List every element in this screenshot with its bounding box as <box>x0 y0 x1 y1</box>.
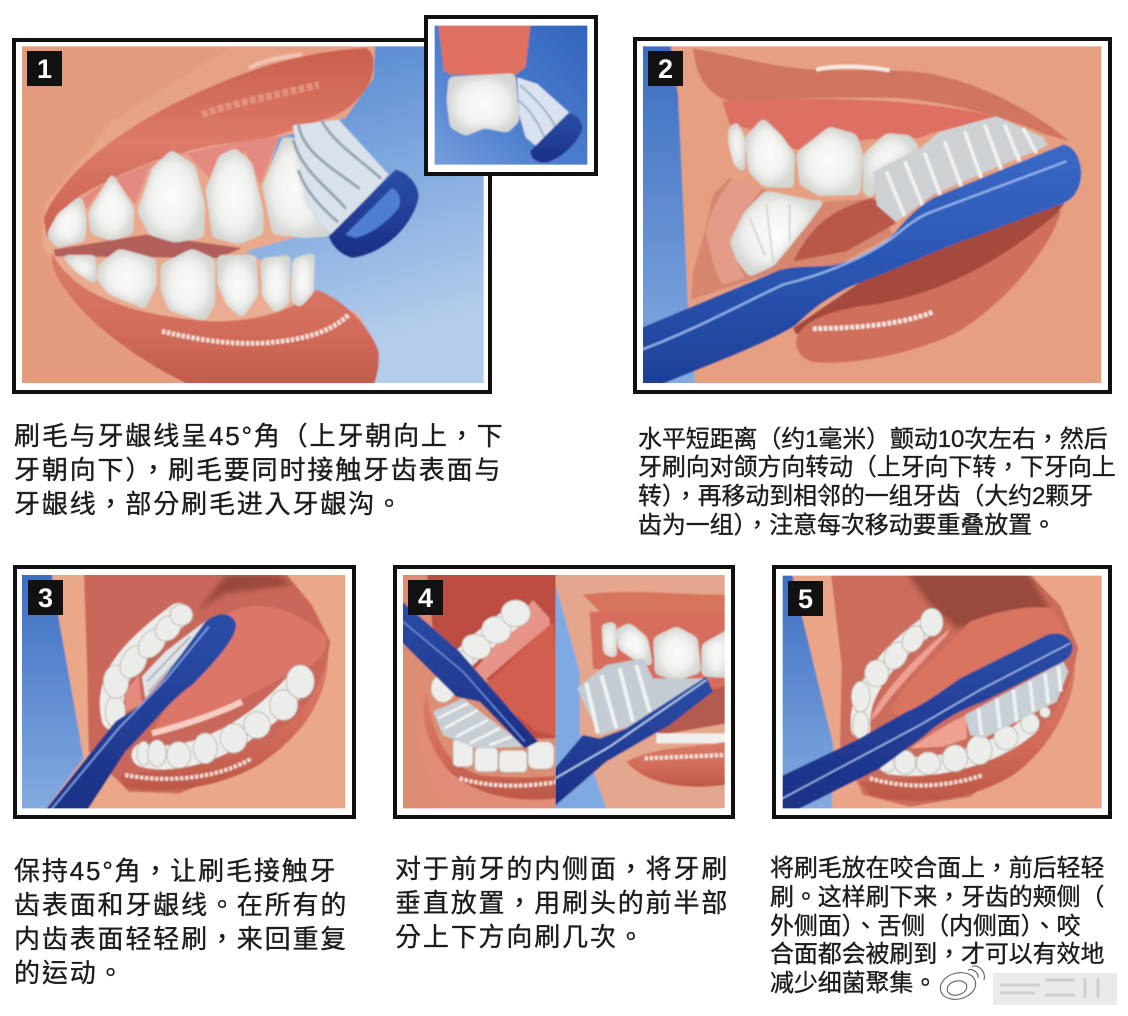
icon: weibo watermark <box>937 966 1117 1005</box>
text: step 1 instructions: 刷毛与牙龈线呈45°角（上牙朝向上，下 <box>14 421 504 451</box>
panel: inset close-up of bristles at gum line <box>426 17 596 174</box>
text: step 2 instructions: 转），再移动到相邻的一组牙齿（大约2颗牙 <box>638 483 1093 510</box>
text: step 1 instructions <box>14 421 504 519</box>
badge: step number 1: 1 <box>37 54 52 84</box>
text: step 3 instructions: 的运动。 <box>14 958 125 988</box>
text: step 4 instructions: 分上下方向刷几次。 <box>395 922 646 952</box>
badge: step number 4 <box>408 580 443 615</box>
text: step 5 instructions: 将刷毛放在咬合面上，前后轻轻 <box>770 855 1104 882</box>
text: step 4 instructions: 对于前牙的内侧面，将牙刷 <box>395 854 729 884</box>
text: step 5 instructions: 减少细菌聚集。 <box>770 970 937 997</box>
text: step 4 instructions: 垂直放置，用刷头的前半部 <box>395 888 729 918</box>
badge: step number 2: 2 <box>658 54 673 84</box>
text: step 3 instructions <box>14 856 348 988</box>
text: step 1 instructions: 牙龈线，部分刷毛进入牙龈沟。 <box>14 489 404 519</box>
text: step 2 instructions <box>638 426 1116 539</box>
panel: step 2 illustration <box>633 38 1113 395</box>
panel: step 4 illustration <box>393 565 736 818</box>
view: inner surface of front teeth <box>403 575 556 808</box>
panel: step 1 illustration <box>12 38 495 395</box>
badge: step number 3: 3 <box>38 583 53 613</box>
upper teeth arch <box>105 696 125 728</box>
badge: step number 4: 4 <box>418 583 433 613</box>
badge: step number 5 <box>788 581 823 616</box>
text: step 2 instructions: 齿为一组），注意每次移动要重叠放置。 <box>638 512 1056 539</box>
text: step 5 instructions <box>770 855 1104 997</box>
text: step 5 instructions: 外侧面）、舌侧（内侧面）、咬 <box>770 913 1080 940</box>
badge: step number 5: 5 <box>798 584 813 614</box>
upper inner teeth <box>458 650 475 666</box>
text: step 3 instructions: 内齿表面轻轻刷，来回重复 <box>14 924 348 954</box>
text: step 5 instructions: 合面都会被刷到，才可以有效地 <box>770 941 1104 968</box>
text: step 2 instructions: 水平短距离（约1毫米）颤动10次左右，然后 <box>638 426 1108 452</box>
badge: step number 1 <box>27 51 62 86</box>
panel: step 3 illustration <box>12 565 355 818</box>
text: step 1 instructions: 牙朝向下），刷毛要同时接触牙齿表面与 <box>14 455 502 485</box>
upper molar arch <box>853 711 869 739</box>
badge: step number 3 <box>28 580 63 615</box>
badge: step number 2 <box>648 51 683 86</box>
text: step 4 instructions <box>395 854 729 952</box>
text: step 5 instructions: 刷。这样刷下来，牙齿的颊侧（ <box>770 884 1104 911</box>
text: step 2 instructions: 牙刷向对颌方向转动（上牙向下转，下牙向上 <box>638 454 1116 481</box>
text: step 3 instructions: 齿表面和牙龈线。在所有的 <box>14 890 348 920</box>
text: step 3 instructions: 保持45°角，让刷毛接触牙 <box>14 856 337 886</box>
panel: step 5 illustration <box>773 565 1113 818</box>
view: brush against upper front teeth <box>556 575 725 808</box>
